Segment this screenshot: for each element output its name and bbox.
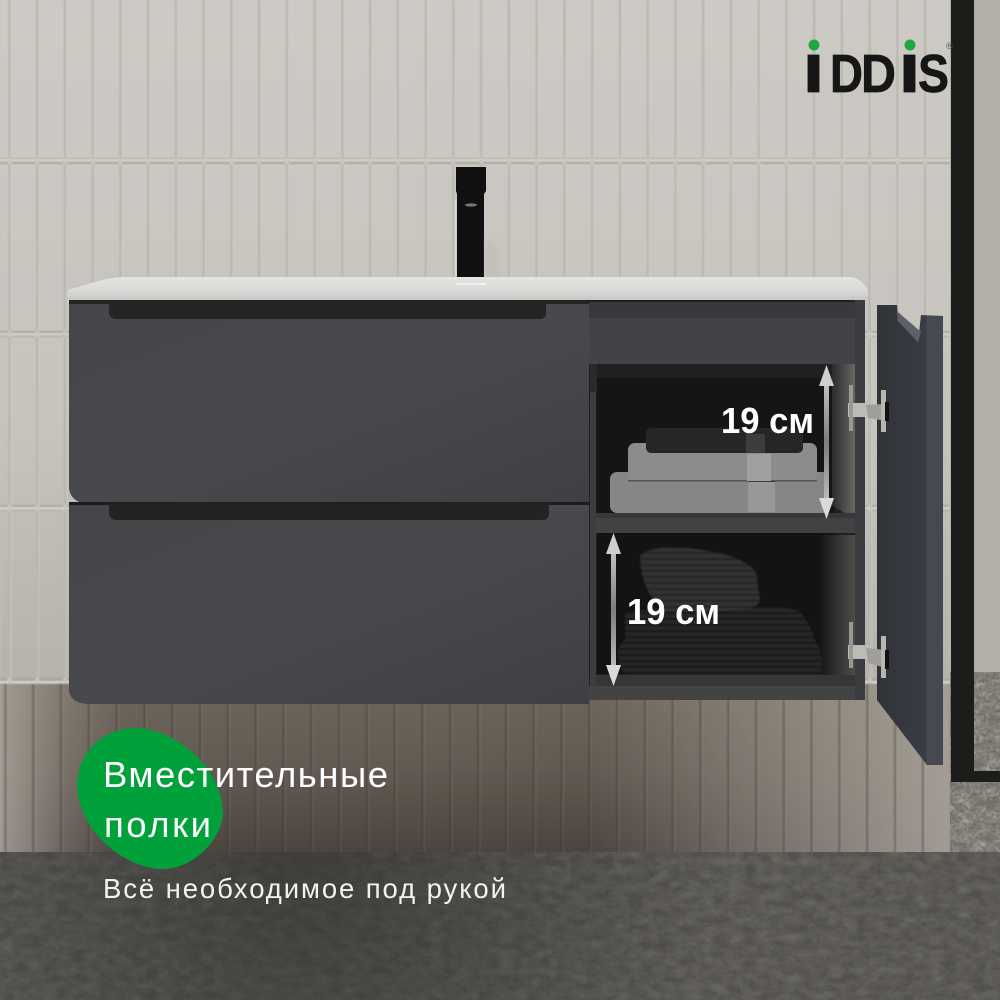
door: open right door bbox=[877, 305, 943, 765]
logo: IDDIS: I bbox=[899, 44, 920, 104]
bottom drawer bbox=[69, 502, 589, 704]
logo: IDDIS bbox=[803, 40, 953, 104]
top drawer bbox=[69, 302, 589, 503]
title: полки bbox=[104, 804, 211, 845]
subtitle: Всё необходимое под рукой bbox=[103, 873, 506, 904]
lower towels bbox=[618, 547, 822, 677]
vanity countertop bbox=[67, 277, 868, 300]
label: upper height: 19 см bbox=[721, 400, 814, 441]
green blob bbox=[77, 728, 223, 869]
logo: IDDIS: I bbox=[803, 44, 824, 104]
title: Вместительные bbox=[103, 754, 388, 795]
bottom shelf bbox=[589, 675, 855, 700]
logo: IDDIS: D bbox=[830, 44, 863, 104]
upper towels bbox=[610, 428, 829, 513]
arrow: upper shelf height bbox=[819, 365, 834, 519]
label: lower height: 19 см bbox=[627, 591, 720, 632]
logo: IDDIS: S bbox=[918, 44, 949, 104]
hinge: upper bbox=[848, 385, 889, 432]
upper shelf bbox=[596, 513, 855, 533]
logo: IDDIS: ® bbox=[946, 41, 953, 51]
title bbox=[103, 754, 388, 845]
view through glass screen: right wall and floor bbox=[950, 0, 1000, 854]
vanity body bbox=[69, 300, 865, 704]
faucet: black mixer bbox=[455, 167, 500, 278]
wall shadow under the vanity bbox=[0, 684, 950, 853]
black shower screen frame bbox=[951, 0, 1000, 782]
logo: IDDIS: D bbox=[861, 44, 896, 104]
open cabinet interior bbox=[589, 300, 865, 700]
arrow: lower shelf height bbox=[606, 533, 621, 686]
hinge: lower bbox=[848, 622, 889, 678]
floor: dark terrazzo bbox=[0, 852, 1000, 1000]
